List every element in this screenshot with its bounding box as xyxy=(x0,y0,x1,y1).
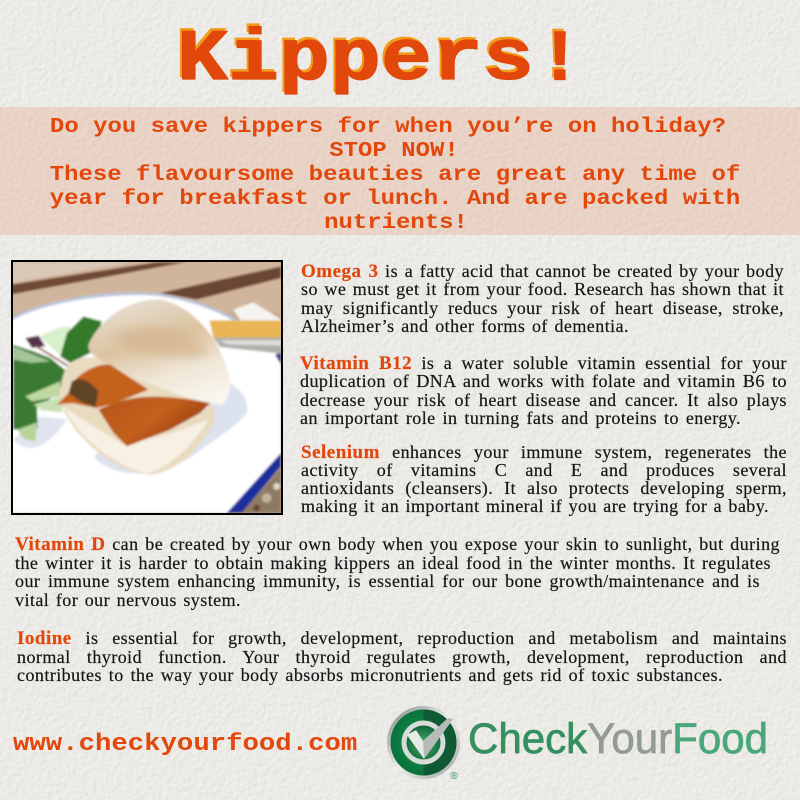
panel: intro banner: Do you save kippers for when you’re on holiday? xyxy=(50,115,726,139)
panel: intro banner: year for breakfast or lunch. And are packed with xyxy=(50,187,740,211)
title: ! xyxy=(538,20,582,102)
text: vitamin B12: decrease your risk of heart disease and cancer. It also plays xyxy=(300,390,787,410)
text: vitamin D: our immune system enhancing immunity, is essential for our bone growth/maintenance and is xyxy=(15,571,760,591)
text: vitamin D: the winter it is harder to obtain making kippers an ideal food in the winter months. It regulates xyxy=(15,553,771,573)
text: selenium: Selenium enhances your immune system, regenerates the xyxy=(301,442,787,463)
text: omega 3: Alzheimer’s and other forms of dementia. xyxy=(301,316,629,336)
text: vitamin B12: Vitamin B12 is a water soluble vitamin essential for your xyxy=(300,353,787,374)
text: selenium: making it an important mineral if you are trying for a baby. xyxy=(301,496,769,516)
text: vitamin B12: an important role in turning fats and proteins to energy. xyxy=(300,408,741,428)
title: Kippers xyxy=(175,16,532,98)
title: ! xyxy=(536,17,580,99)
text: omega 3: Omega 3 is a fatty acid that cannot be created by your body xyxy=(301,261,784,282)
logo: CheckYourFood xyxy=(387,706,768,782)
website url: www.checkyourfood.com xyxy=(13,731,357,758)
text: vitamin B12: duplication of DNA and works with folate and vitamin B6 to xyxy=(300,371,787,391)
text: selenium xyxy=(301,442,787,516)
text: vitamin D: Vitamin D can be created by your own body when you expose your skin to sunlight, but during xyxy=(15,534,780,555)
panel: intro banner xyxy=(0,107,800,235)
panel: intro banner: nutrients! xyxy=(324,211,468,235)
registered mark: ® xyxy=(450,771,458,782)
icon: check badge xyxy=(387,706,460,779)
text: omega 3 xyxy=(301,261,784,336)
title: Kippers xyxy=(177,19,534,101)
text: selenium: antioxidants (cleansers). It also protects developing sperm, xyxy=(301,478,787,498)
panel: intro banner: These flavoursome beauties are great any time of xyxy=(50,163,740,187)
text: omega 3: so we must get it from your food. Research has shown that it xyxy=(301,279,784,299)
text: vitamin D xyxy=(14,534,780,610)
text: iodine: contributes to the way your body absorbs micronutrients and gets rid of toxic substances. xyxy=(17,665,723,685)
text: omega 3: may significantly reducs your risk of heart disease, stroke, xyxy=(301,298,784,318)
text: selenium: activity of vitamins C and E and produces several xyxy=(301,460,787,480)
panel: intro banner: STOP NOW! xyxy=(329,139,459,163)
text: iodine: normal thyroid function. Your thyroid regulates growth, development, reproduction and xyxy=(17,647,787,667)
photo: kipper sandwich xyxy=(11,260,283,515)
wordmark: CheckYourFood xyxy=(468,715,768,763)
text: iodine: Iodine is essential for growth, development, reproduction and metabolism and maintains xyxy=(17,628,787,649)
text: vitamin B12 xyxy=(300,353,787,428)
text: vitamin D: vital for our nervous system. xyxy=(15,590,241,610)
text: iodine xyxy=(17,628,787,686)
